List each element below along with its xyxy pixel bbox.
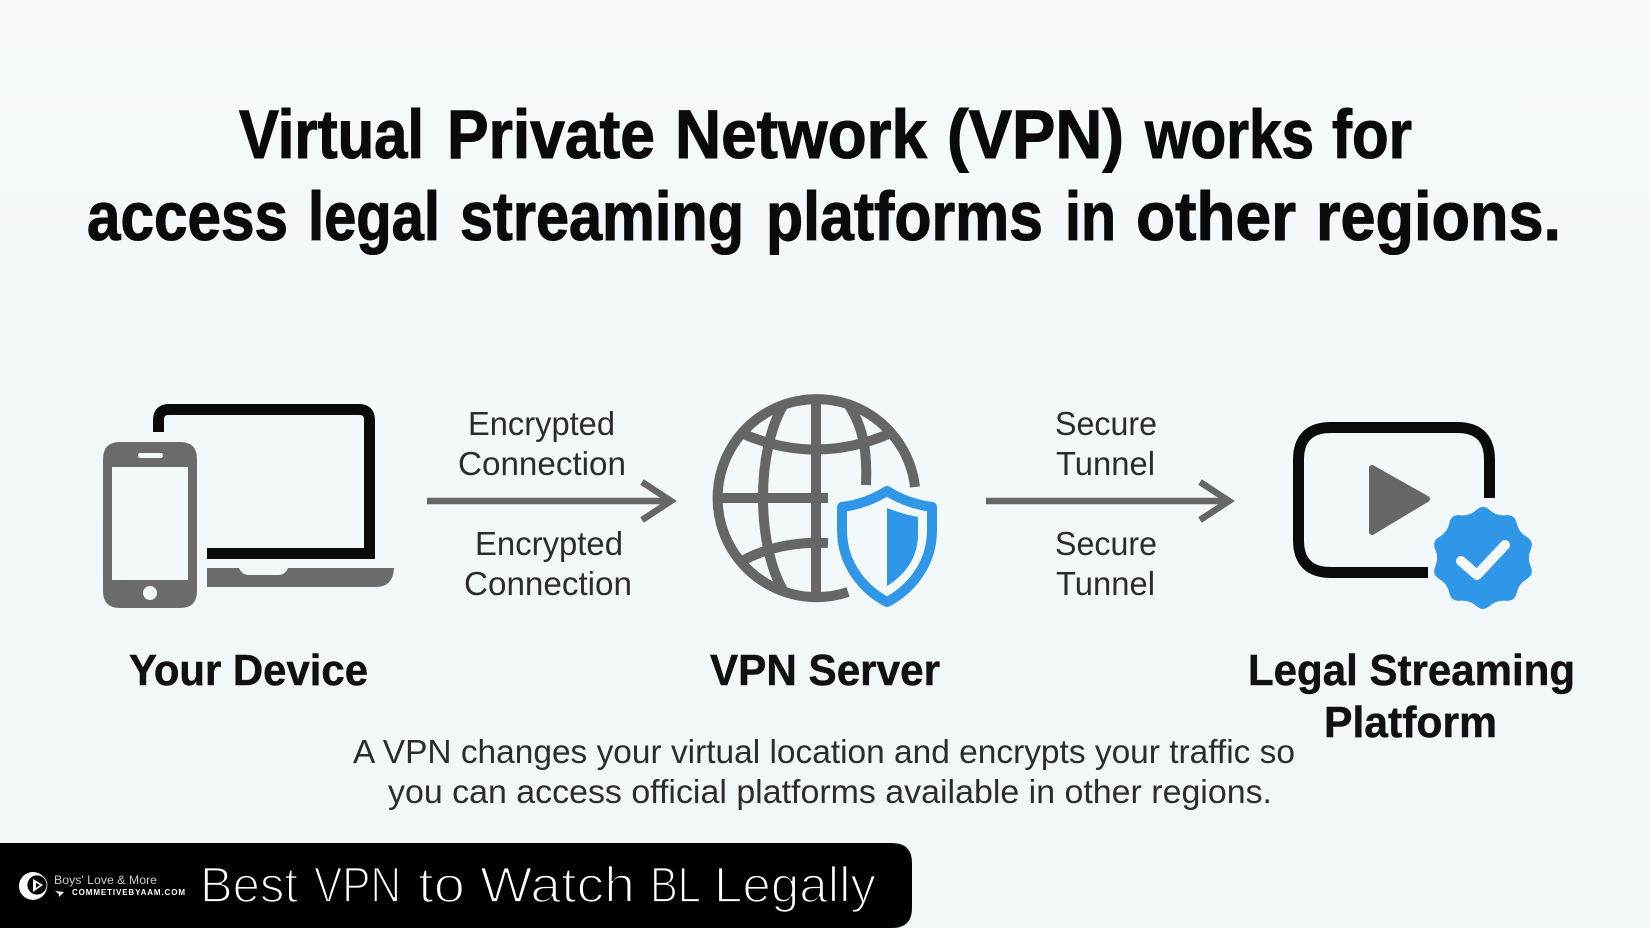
arrow: device to server — [427, 482, 671, 520]
title: other — [1136, 178, 1296, 255]
text: explanation caption: you can access official platforms available in other regions. — [388, 773, 1272, 810]
text: encrypted connection labels: Encrypted — [475, 525, 623, 562]
title: streaming — [460, 178, 744, 255]
icon: globe — [718, 396, 915, 600]
text: banner headline: Legally — [714, 857, 876, 913]
title: (VPN) — [947, 96, 1124, 173]
title — [87, 96, 1561, 255]
text: explanation caption — [353, 733, 1295, 810]
title: Network — [675, 96, 928, 173]
text: banner headline: VPN — [314, 857, 401, 913]
icon: site logo — [19, 872, 47, 900]
panel: legal streaming platform — [1248, 428, 1575, 747]
icon: shield — [842, 491, 932, 602]
text: banner headline: Best — [200, 857, 298, 913]
text: site name: COMMETIVEBYAAM.COM — [72, 888, 185, 897]
text: banner headline: Watch — [480, 857, 635, 913]
text: secure tunnel labels: Tunnel — [1056, 445, 1155, 482]
title: platforms — [766, 178, 1043, 255]
icon: phone — [103, 442, 197, 608]
text: encrypted connection labels — [458, 405, 632, 602]
text: secure tunnel labels — [1055, 405, 1157, 602]
text: banner headline: to — [418, 857, 465, 913]
label: legal streaming platform — [1248, 646, 1575, 747]
text: secure tunnel labels: Tunnel — [1056, 565, 1155, 602]
panel: vpn server — [710, 396, 940, 695]
title: Private — [447, 96, 655, 173]
title: access — [87, 178, 288, 255]
text: secure tunnel labels: Secure — [1055, 525, 1157, 562]
label: legal streaming platform: Legal Streaming — [1248, 646, 1575, 695]
text: encrypted connection labels: Connection — [464, 565, 632, 602]
title: regions. — [1316, 178, 1561, 255]
text: encrypted connection labels: Encrypted — [468, 405, 615, 442]
title: in — [1065, 178, 1116, 255]
title: works — [1144, 96, 1314, 173]
text: site name — [54, 873, 185, 897]
icon: verified badge — [1434, 507, 1532, 609]
label: your device: Your Device — [129, 646, 368, 695]
label: vpn server: VPN Server — [710, 646, 940, 695]
icon: laptop — [158, 410, 394, 587]
title: legal — [308, 178, 440, 255]
label: legal streaming platform: Platform — [1324, 698, 1497, 747]
text: secure tunnel labels: Secure — [1055, 405, 1157, 442]
text: banner headline: BL — [650, 857, 701, 913]
text: banner headline — [200, 857, 876, 913]
title: Virtual — [239, 96, 424, 173]
panel: your device — [103, 410, 394, 695]
text: explanation caption: A VPN changes your virtual location and encrypts your traffic so — [353, 733, 1295, 770]
text: site name: Boys' Love & More — [54, 873, 157, 887]
text: encrypted connection labels: Connection — [458, 445, 626, 482]
title: for — [1332, 96, 1412, 173]
arrow: server to platform — [986, 482, 1229, 520]
icon: video frame — [1298, 428, 1490, 572]
footer banner — [0, 843, 912, 928]
icon: play triangle — [1372, 468, 1427, 532]
